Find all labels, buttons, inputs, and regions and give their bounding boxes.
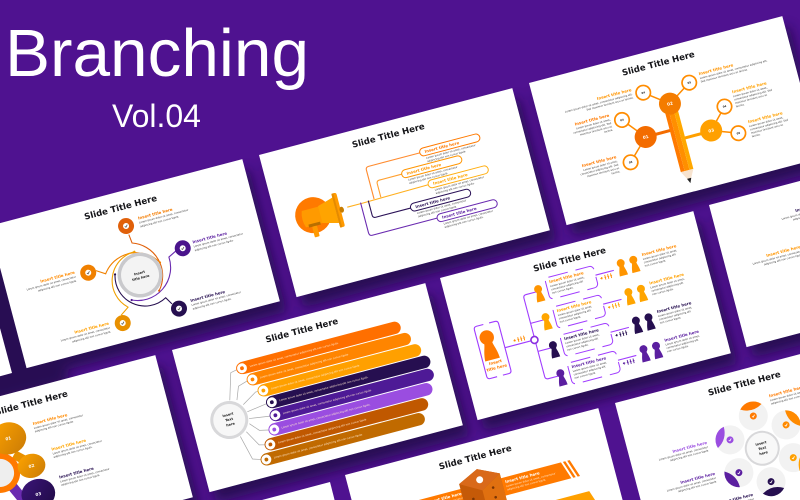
small node labels: 04 xyxy=(620,118,624,122)
bar 6: Lorem ipsum dolor sit amet, consectetur adipiscing elit non cursus ligula. xyxy=(281,402,371,430)
icon: purple node xyxy=(173,238,192,258)
text block: lower left: adipiscing elit non cursus ligula. xyxy=(72,329,112,344)
row 4: consectetur adipiscing elit xyxy=(573,364,606,377)
petal upper left xyxy=(708,420,748,458)
small node labels: 05 xyxy=(687,80,692,85)
slide: long bars xyxy=(172,283,463,492)
bar 7: Lorem ipsum dolor sit amet, consectetur adipiscing elit non cursus ligula. xyxy=(278,417,368,444)
item 2: adipiscing elit non cursus ligula. xyxy=(409,171,449,185)
icon: dark node xyxy=(169,299,189,318)
text block: top left: Sed maximus tincidunt arcu ac lacinia. xyxy=(586,95,634,112)
bar 6 xyxy=(267,382,434,437)
slide title: Slide Title Here xyxy=(351,122,426,151)
row 2: non cursus ligula. xyxy=(652,287,674,296)
text block: lower right: Insert title here xyxy=(747,110,783,124)
row 2: Lorem ipsum dolor sit amet, xyxy=(557,304,593,317)
center hub: Text xyxy=(758,445,767,451)
text block: lower left: Insert title here xyxy=(74,321,110,335)
connectors xyxy=(614,72,739,162)
bar 5 xyxy=(269,367,435,423)
text block: dark xyxy=(780,199,800,224)
text block 1: adipiscing elit non cursus ligula. xyxy=(34,419,74,433)
item 4: Lorem ipsum dolor sit amet, consectetur xyxy=(417,198,468,215)
center hub xyxy=(206,397,253,443)
text block 2: Lorem ipsum dolor sit amet, consectetur xyxy=(52,438,103,456)
text block: right xyxy=(192,226,245,252)
center hub xyxy=(113,248,168,303)
text block: left: maximus tincidunt arcu ac xyxy=(579,124,613,137)
center hub: Insert xyxy=(755,440,767,447)
bar 2: Lorem ipsum dolor sit amet, consectetur adipiscing elit non cursus ligula. xyxy=(259,352,349,379)
subtitle: Vol.04: Vol.04 xyxy=(112,98,201,134)
icon: link people xyxy=(513,335,526,343)
text block: upper left: Insert title here xyxy=(672,440,708,454)
text block 1: Lorem ipsum dolor sit amet, consectetur xyxy=(33,413,85,430)
text block: lower right xyxy=(190,285,243,311)
text block: top left: Lorem ipsum dolor sit amet, consectetur adipiscing elit. xyxy=(565,92,633,114)
text block: lower left: Insert title here xyxy=(581,154,617,168)
petal bottom left xyxy=(718,455,757,494)
row 2: Lorem ipsum dolor sit amet, xyxy=(650,277,685,289)
slide: bottom edge fragment xyxy=(77,482,360,500)
item 5: Lorem ipsum dolor sit amet, consectetur xyxy=(443,208,494,226)
text block: lower left: adipiscing elit non cursus ligula. xyxy=(678,479,718,493)
slide: text only, right edge xyxy=(709,138,800,347)
center hub: title here xyxy=(132,274,151,282)
item 4: Insert title here xyxy=(415,195,451,209)
row 4: non cursus ligula. xyxy=(667,344,689,353)
text block 3: adipiscing elit non cursus ligula. xyxy=(61,473,101,487)
item 5 xyxy=(436,199,500,230)
text block: upper left xyxy=(657,440,710,465)
text block: lower left: lacinia. xyxy=(611,169,621,175)
slide title: Slide Title Here xyxy=(532,246,607,275)
text block: top right: Lorem ipsum dolor sit amet, consectetur xyxy=(139,207,190,224)
row 4 xyxy=(554,329,704,388)
row 2: consectetur adipiscing elit xyxy=(558,308,591,320)
text block: top center: Sed maximus tincidunt arcu ac lacinia. xyxy=(700,67,748,84)
text block: lower right: Lorem ipsum dolor sit amet, consectetur xyxy=(191,290,242,307)
item 3 xyxy=(427,165,491,196)
small node labels: 04 xyxy=(641,90,646,95)
row 2 xyxy=(539,272,689,332)
text block 3: Lorem ipsum dolor sit amet, consectetur xyxy=(60,466,111,483)
row 3: Lorem ipsum dolor sit amet, xyxy=(657,305,693,318)
row 1: Lorem ipsum dolor sit amet, xyxy=(550,275,585,288)
text block: left xyxy=(571,113,614,142)
text block: lower left xyxy=(665,471,718,496)
text block: lower right: Lorem ipsum dolor sit amet, xyxy=(749,115,784,128)
row 1: consectetur adipiscing elit xyxy=(551,279,584,291)
main title: Branching: Branching xyxy=(5,16,309,91)
center hub xyxy=(741,427,784,470)
text block: lower right: Insert title here xyxy=(190,289,226,303)
row 1: non cursus ligula. xyxy=(552,285,574,295)
text block: left: lacinia. xyxy=(604,128,614,134)
slide: pencil tree xyxy=(529,16,800,225)
text block: left xyxy=(25,269,78,295)
text block: right: Lorem ipsum dolor sit amet, xyxy=(733,85,768,98)
small node labels: 05 xyxy=(628,160,633,165)
slide: megaphone branches xyxy=(259,88,550,297)
icon: dark orange node xyxy=(116,216,136,236)
text block 1 xyxy=(32,408,85,433)
banner: right orange: Insert title here xyxy=(504,470,540,484)
text block: top left: Insert title here xyxy=(596,87,632,101)
blob 03 xyxy=(18,475,59,500)
node 01: 01 xyxy=(642,134,649,140)
slide title: Slide Title Here xyxy=(83,194,158,223)
bar 1 xyxy=(235,320,402,376)
row 4: consectetur adipiscing elit xyxy=(666,338,699,350)
node 03 xyxy=(698,117,725,144)
text block 2: adipiscing elit non cursus ligula. xyxy=(53,445,93,459)
petal top right xyxy=(768,404,800,443)
node 02: 02 xyxy=(667,100,673,107)
text block: upper left: Lorem ipsum dolor sit amet, consectetur xyxy=(658,444,709,462)
text block: top right: Insert title here xyxy=(137,207,173,221)
row 2: non cursus ligula. xyxy=(559,314,582,324)
item 4: adipiscing elit non cursus ligula. xyxy=(417,204,458,218)
banner: right orange: Lorem ipsum dolor sit amet, consectetur xyxy=(506,471,557,488)
blob connectors xyxy=(14,451,32,474)
row 1: Insert title here xyxy=(548,270,584,284)
text block: right: adipiscing elit non cursus ligula. xyxy=(194,238,234,252)
row 3: consectetur adipiscing elit xyxy=(566,336,599,348)
bar 5: Lorem ipsum dolor sit amet, consectetur adipiscing elit non cursus ligula. xyxy=(282,388,372,415)
text block: top right xyxy=(137,203,191,228)
row 2: Insert title here xyxy=(556,299,592,313)
text block: right: Lorem ipsum dolor sit amet, consectetur xyxy=(193,231,244,248)
text block: left: Insert title here xyxy=(40,270,76,284)
center hub: here xyxy=(759,450,769,456)
text block 3: Insert title here xyxy=(58,466,94,480)
blob 02: 02 xyxy=(28,463,35,469)
center hub: here xyxy=(226,421,236,428)
center hub: Insert xyxy=(134,270,146,276)
row 3: non cursus ligula. xyxy=(567,342,589,352)
slide: people hierarchy xyxy=(440,211,731,420)
text block: lower left: consectetur adipiscing elit. Sed xyxy=(580,162,619,176)
text block 2 xyxy=(51,434,104,459)
branch tree xyxy=(339,153,437,240)
text block: lower right: consectetur adipiscing elit. Sed xyxy=(750,118,789,132)
icon: amber node xyxy=(113,313,133,333)
slide title: Slide Title Here xyxy=(438,444,513,473)
text block 1: Insert title here xyxy=(32,412,68,426)
item 3: Insert title here xyxy=(432,172,468,186)
text block: left: Lorem ipsum dolor sit amet, consectetur xyxy=(26,274,77,291)
row 3: Lorem ipsum dolor sit amet, xyxy=(565,332,600,345)
row 4: non cursus ligula. xyxy=(574,370,597,380)
text block 3 xyxy=(58,462,112,487)
blob 01: 01 xyxy=(5,435,12,442)
text block 2: Insert title here xyxy=(51,438,87,452)
bar 3: Lorem ipsum dolor sit amet, consectetur adipiscing elit non cursus ligula. xyxy=(271,363,361,390)
icon: megaphone xyxy=(291,190,349,241)
banner: right amber xyxy=(506,490,600,500)
item 3: adipiscing elit non cursus ligula. xyxy=(435,181,475,195)
text block: orange xyxy=(751,244,800,269)
item 1: Lorem ipsum dolor sit amet, consectetur xyxy=(426,143,477,160)
purple branch xyxy=(12,483,27,500)
node 01 xyxy=(632,124,659,150)
text block: left: consectetur adipiscing elit. Sed xyxy=(573,121,612,135)
small node labels: 04 xyxy=(722,104,727,109)
row 3: Insert title here xyxy=(656,300,692,314)
slide title: Slide Title Here xyxy=(621,50,696,79)
node 03: 03 xyxy=(708,127,715,134)
banner: right orange: adipiscing elit non cursus ligula. xyxy=(507,477,547,492)
icon: pencil xyxy=(664,106,697,185)
bar 4 xyxy=(265,354,432,410)
small nodes xyxy=(605,63,747,171)
slide: dice banners xyxy=(345,408,636,500)
icon: orange node xyxy=(78,263,98,282)
text block: right: Insert title here xyxy=(192,230,228,244)
row 2: Insert title here xyxy=(649,272,685,286)
petal top xyxy=(736,398,771,434)
blob 01 xyxy=(0,418,30,458)
bar 8: Lorem ipsum dolor sit amet, consectetur adipiscing elit non cursus ligula. xyxy=(273,432,363,459)
text block: top center xyxy=(698,54,769,84)
text block: upper left: adipiscing elit non cursus ligula. xyxy=(670,448,710,462)
slide: circular branching xyxy=(0,159,280,368)
row 1: Lorem ipsum dolor sit amet, xyxy=(642,248,678,261)
text block: lower left: Lorem ipsum dolor sit amet, consectetur xyxy=(60,325,111,342)
slide title: Slide Title Here xyxy=(707,370,782,399)
text block: top right xyxy=(768,380,800,406)
banner: right orange xyxy=(497,459,580,497)
text block: lower left xyxy=(578,154,621,183)
item 1: Insert title here xyxy=(424,140,460,154)
blob 02 xyxy=(15,451,48,481)
row 1: Insert title here xyxy=(641,243,677,257)
item 1: adipiscing elit non cursus ligula. xyxy=(427,149,467,163)
petal bottom xyxy=(753,464,789,499)
text block: right: Insert title here xyxy=(731,80,767,94)
item 3: Lorem ipsum dolor sit amet, consectetur xyxy=(434,175,485,192)
row 3: Insert title here xyxy=(564,327,600,341)
small node labels xyxy=(612,69,741,165)
root box: Insert xyxy=(488,358,502,366)
text block: lower right xyxy=(747,109,791,138)
root box: title here xyxy=(486,362,508,373)
text block: left: adipiscing elit non cursus ligula. xyxy=(37,278,78,293)
item 2: Lorem ipsum dolor sit amet, consectetur xyxy=(408,165,459,182)
item 4 xyxy=(410,188,474,220)
petal right xyxy=(776,439,800,478)
row 1: non cursus ligula. xyxy=(644,258,667,268)
row 4: Lorem ipsum dolor sit amet, xyxy=(572,360,607,373)
text block: lower left: Lorem ipsum dolor sit amet, xyxy=(583,159,618,172)
text block: top center: Lorem ipsum dolor sit amet, consectetur adipiscing elit. xyxy=(699,58,768,80)
text block: top center: Insert title here xyxy=(698,62,734,76)
text block: right: consectetur adipiscing elit. Sed xyxy=(734,88,773,102)
row 1 xyxy=(532,243,682,303)
text block: lower left xyxy=(59,320,112,346)
text block: lower right: lacinia. xyxy=(751,132,761,138)
slide title: Slide Title Here xyxy=(265,317,340,346)
text block: right xyxy=(731,79,775,108)
row 3: consectetur adipiscing elit xyxy=(658,309,691,321)
item 1 xyxy=(419,133,483,164)
slide: petal wheel xyxy=(615,336,800,500)
text block: left: Insert title here xyxy=(574,113,610,127)
center hub: Text xyxy=(225,417,234,423)
slide: blob branches, bottom left xyxy=(0,355,193,500)
text block: lower right: maximus tincidunt arcu ac xyxy=(750,122,784,135)
text block: right: lacinia. xyxy=(735,102,745,108)
bar 3 xyxy=(257,343,423,398)
text block: lower left: Lorem ipsum dolor sit amet, consectetur xyxy=(666,475,717,493)
hub node xyxy=(530,336,539,344)
root box xyxy=(474,321,512,379)
connectors xyxy=(223,364,280,463)
row 2: consectetur adipiscing elit xyxy=(651,281,684,293)
trunk lines xyxy=(493,270,636,387)
row 4: Insert title here xyxy=(571,355,607,369)
row 3: non cursus ligula. xyxy=(659,315,682,325)
bar 4: Lorem ipsum dolor sit amet, consectetur adipiscing elit non cursus ligula. xyxy=(279,375,369,402)
bar 1: Lorem ipsum dolor sit amet, consectetur adipiscing elit non cursus ligula. xyxy=(249,341,339,368)
text block: left: Lorem ipsum dolor sit amet, xyxy=(576,117,611,130)
text block: top left xyxy=(563,87,634,117)
small node labels: 05 xyxy=(736,131,741,136)
center hub: Insert xyxy=(222,411,234,418)
bar 8 xyxy=(260,412,426,467)
text block: right: maximus tincidunt arcu ac xyxy=(734,92,768,105)
row 4: Lorem ipsum dolor sit amet, xyxy=(665,334,700,347)
bar 2 xyxy=(246,332,412,387)
text block: lower left: maximus tincidunt arcu ac xyxy=(587,166,620,178)
slide fragment: far left edge xyxy=(0,231,12,403)
item 5: Insert title here xyxy=(441,206,477,220)
row 4: Insert title here xyxy=(664,329,700,343)
item 5: adipiscing elit non cursus ligula. xyxy=(444,215,484,229)
item 2: Insert title here xyxy=(406,162,442,176)
text block: bottom xyxy=(703,492,755,500)
node 02 xyxy=(657,90,683,117)
text block: lower left: Insert title here xyxy=(680,471,716,485)
row 1: consectetur adipiscing elit xyxy=(643,252,676,264)
banner: left orange xyxy=(395,488,469,500)
icon: dice xyxy=(457,464,510,500)
curved branch arcs xyxy=(89,224,188,320)
text block: top right: adipiscing elit non cursus ligula. xyxy=(140,214,180,228)
item 2 xyxy=(401,155,465,186)
row 3 xyxy=(547,300,697,360)
blob 03: 03 xyxy=(35,491,42,497)
bar 7 xyxy=(264,397,430,452)
orange ring hub xyxy=(0,452,21,494)
text block: lower right: adipiscing elit non cursus ligula. xyxy=(192,296,232,311)
